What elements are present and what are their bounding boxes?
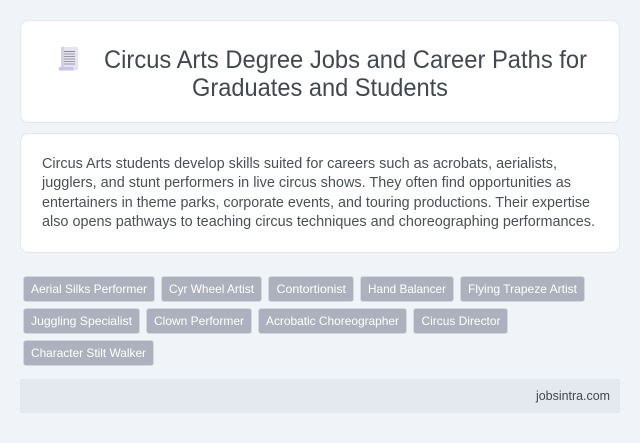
tag: Acrobatic Choreographer: Acrobatic Choreographer (266, 314, 399, 328)
panel: header (20, 20, 620, 122)
title: Circus Arts Degree Jobs and Career Paths for (104, 46, 587, 74)
title: Graduates and Students (192, 74, 448, 102)
text block: description: Circus Arts students develop skills suited for careers such as acrobats, aerialists, (42, 155, 557, 172)
text block: description: jugglers, and stunt performers in live circus shows. They often find opportunities as (41, 174, 571, 191)
tags (24, 276, 584, 366)
tag: Clown Performer (146, 308, 252, 334)
tag: Acrobatic Choreographer (258, 308, 406, 334)
tag: Contortionist (268, 276, 354, 302)
tag: Character Stilt Walker: Character Stilt Walker (31, 346, 146, 360)
tag: Character Stilt Walker (24, 340, 154, 366)
tag: Cyr Wheel Artist (162, 276, 262, 302)
text block: description: also opens pathways to teaching circus techniques and choreographing performances. (42, 213, 595, 230)
tag: Contortionist: Contortionist (276, 282, 347, 296)
tag: Cyr Wheel Artist: Cyr Wheel Artist (169, 282, 255, 296)
text block: description (41, 155, 595, 230)
tag: Hand Balancer: Hand Balancer (368, 282, 446, 296)
tag: Flying Trapeze Artist (460, 276, 584, 302)
tag: Juggling Specialist (24, 308, 140, 334)
tag: Circus Director (414, 308, 508, 334)
footer source text: jobsintra.com (535, 389, 610, 403)
title (104, 46, 587, 102)
panel: description (20, 134, 620, 252)
tag: Juggling Specialist: Juggling Specialist (31, 314, 133, 328)
tag: Clown Performer: Clown Performer (154, 314, 244, 328)
icon: paper scroll (59, 47, 78, 70)
tag: Flying Trapeze Artist: Flying Trapeze Artist (468, 282, 578, 296)
tag: Hand Balancer (360, 276, 454, 302)
text block: description: entertainers in theme parks, corporate events, and touring productions. Their expertise (42, 194, 590, 211)
tag: Aerial Silks Performer: Aerial Silks Performer (31, 282, 147, 296)
tag: Aerial Silks Performer (24, 276, 154, 302)
footer (20, 379, 620, 413)
tag: Circus Director: Circus Director (422, 314, 501, 328)
